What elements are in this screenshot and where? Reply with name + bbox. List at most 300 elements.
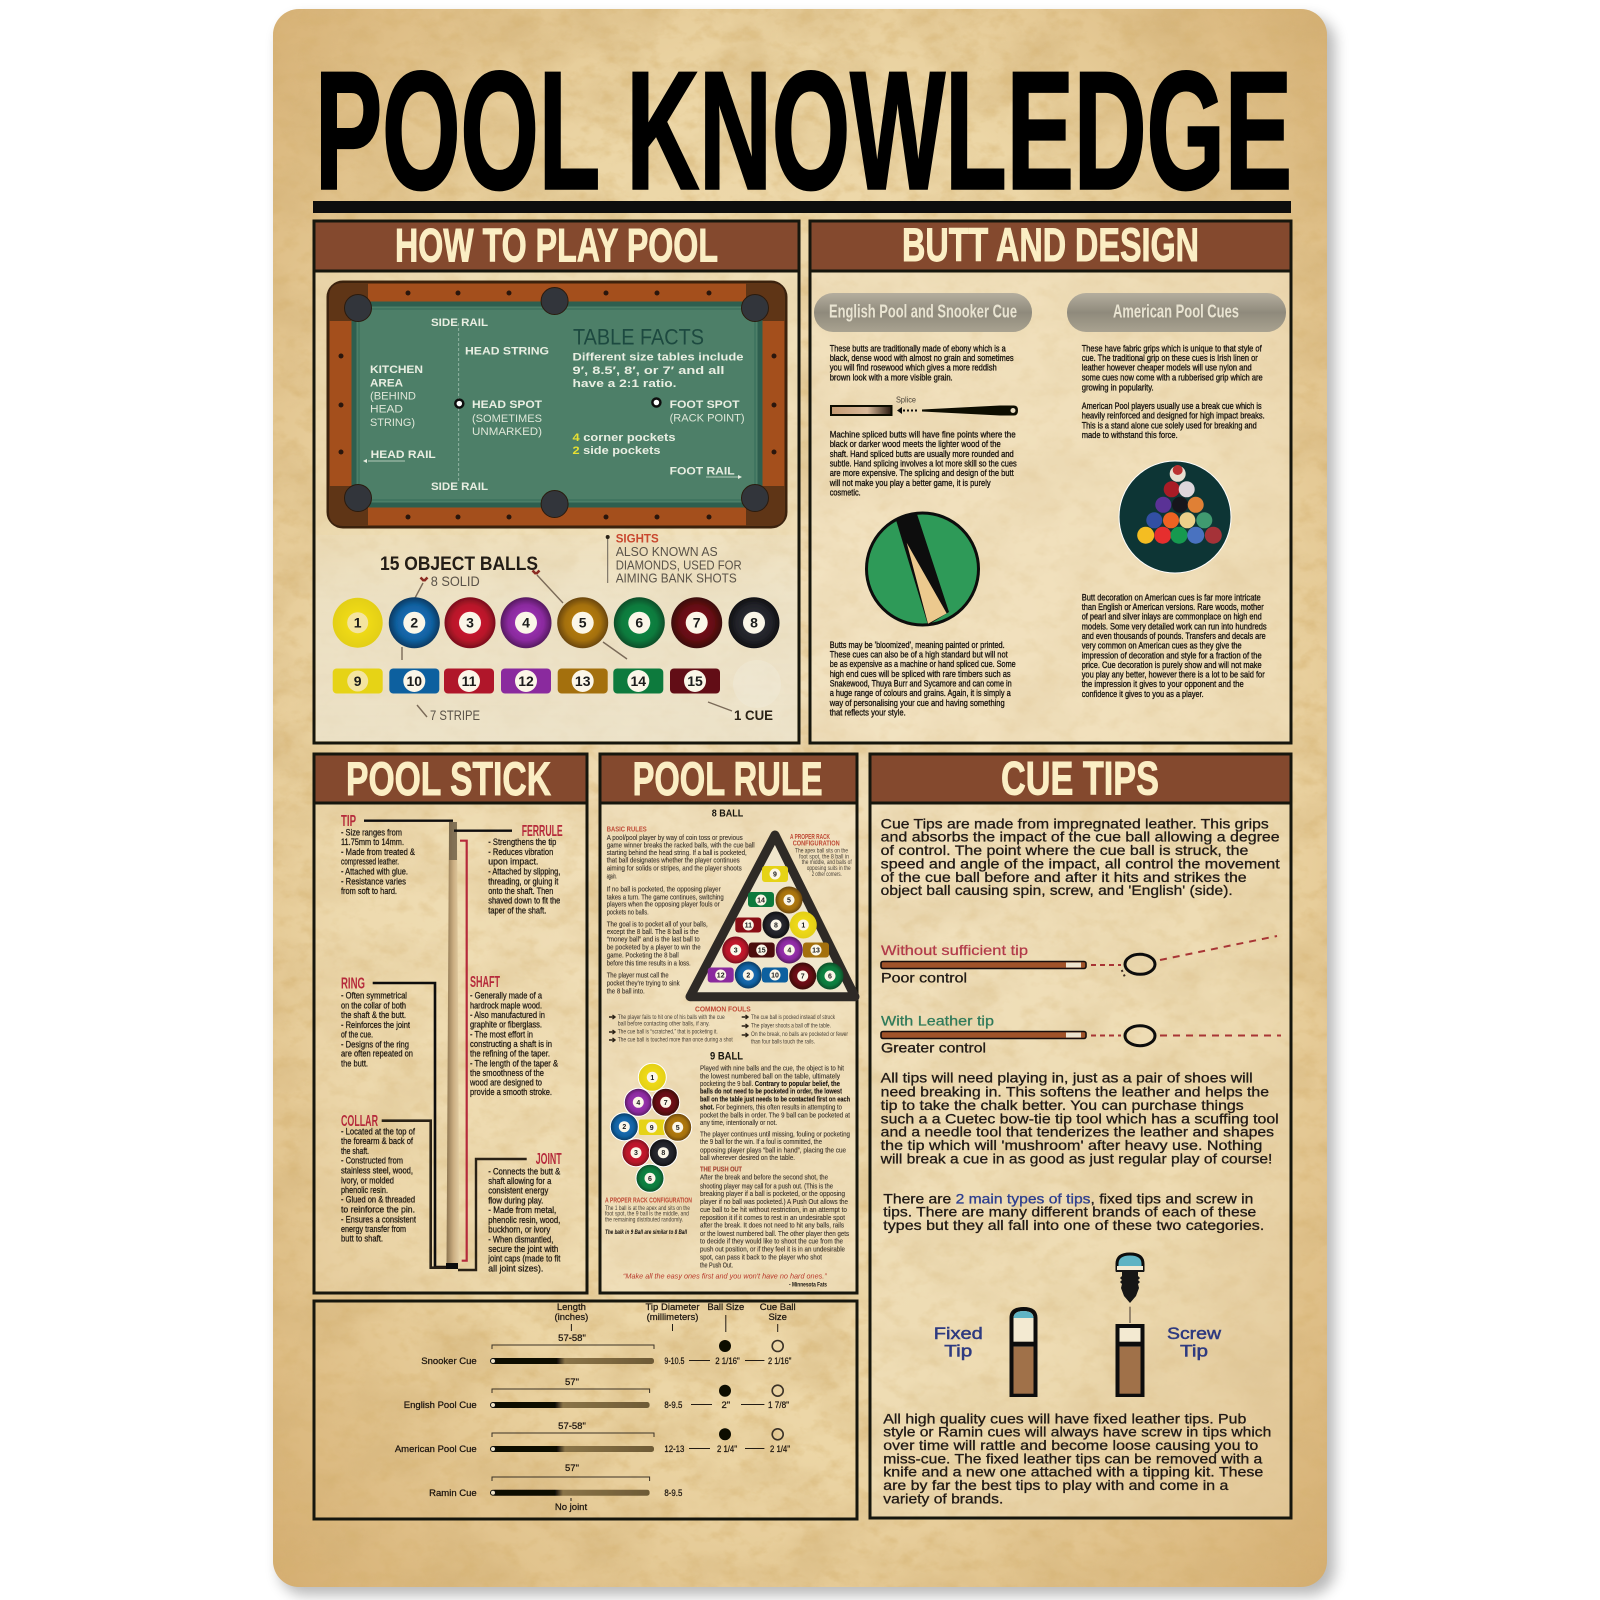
label: ring: on the collar of both [341, 1000, 406, 1010]
splice cue diagram: Splice [896, 395, 916, 404]
text: english butts intro: you will find rosewood which gives a more reddish [830, 363, 997, 373]
row: snooker cue [421, 1333, 791, 1367]
9 ball diamond rack: 5 [676, 1125, 680, 1132]
common fouls: The cue ball is “scratched,” that is pocketing it. [618, 1029, 718, 1035]
pool stick diagram [364, 821, 527, 1270]
label: ferrule: - Attached by slipping, [488, 866, 560, 876]
ball connector lines [402, 570, 732, 717]
9 ball diamond rack: 3 [634, 1150, 638, 1157]
pill: english pool and snooker cue: English Pool and Snooker Cue [829, 302, 1017, 322]
8 ball rules text: BASIC RULES [607, 827, 647, 834]
text: american butt decoration: confidence it gives to you as a player. [1082, 689, 1204, 699]
playing in text: will break a cue in as good as just regular play of course! [880, 1150, 1272, 1166]
8 ball rules text: again. [607, 871, 617, 880]
fixed vs screw text: miss-cue. The fixed leather tips can be removed with a [883, 1450, 1263, 1466]
rack triangle with balls: 14 [757, 898, 765, 904]
icon: fixed tip [934, 1309, 1036, 1395]
8 ball rules text: the 8 ball into. [607, 986, 645, 995]
label: collar: - Located at the top of [341, 1126, 415, 1136]
8 ball rules text: game winner breaks the racked balls, with the cue ball [607, 840, 755, 849]
table labels: STRING) [370, 417, 415, 429]
header: pool stick: POOL STICK [346, 752, 551, 805]
9 ball rules text: shot. For beginners, this often results in attempting to [700, 1102, 842, 1111]
panel: how to play pool [314, 218, 799, 743]
rack configuration note: The apex ball sits on the [795, 849, 849, 855]
text: american butt decoration: models. Some very detailed work can run into hundreds [1082, 621, 1267, 631]
diamonds [338, 290, 776, 520]
rack configuration note [790, 834, 852, 878]
label: shaft: - Also manufactured in [470, 1010, 545, 1020]
8 ball rules text: before this time results in a loss. [607, 959, 691, 968]
striped balls row [333, 668, 720, 694]
text: american butt decoration: you play any better, however there is a lot to be said for [1082, 670, 1265, 680]
rack configuration note: CONFIGURATION [793, 841, 840, 848]
sights note: DIAMONDS, USED FOR [616, 558, 742, 572]
column headers: Length [557, 1302, 586, 1313]
icon: fixed tip: Tip [944, 1342, 972, 1361]
playing in text: the tip which will 'mushroom' after heavy use. Nothing [881, 1137, 1262, 1153]
label: collar: to reinforce the pin. [341, 1204, 415, 1214]
table labels: KITCHEN [370, 364, 423, 376]
label: tip: TIP [341, 813, 356, 830]
label: ferrule: shaved down to fit the [488, 896, 560, 906]
row: snooker cue: 2 1/16" [768, 1356, 791, 1367]
playing in text: need breaking in. This softens the leather and helps the [881, 1084, 1269, 1100]
row: snooker cue: 2 1/16" [715, 1356, 740, 1367]
text: bloomized butts: Snakewood, Thuya Burr and Sycamore and can come in [830, 679, 1012, 689]
text: american butt decoration: and even thousands of pounds. Transfers and decals are [1082, 631, 1266, 641]
text: bloomized butts: that reflects your style. [830, 708, 906, 718]
diagram: without sufficient tip: Without sufficient tip [881, 942, 1028, 958]
8 ball rules text: pockets no balls. [607, 907, 649, 916]
label: joint: secure the joint with [488, 1244, 558, 1254]
9 ball rules text: any time, intentionally or not. [700, 1118, 777, 1127]
pill: english pool and snooker cue [814, 293, 1032, 332]
solid balls row: 2 [410, 614, 418, 630]
diagram: with leather tip: Greater control [881, 1040, 986, 1056]
9 ball rules text: Played with nine balls and the cue, the object is to hit [700, 1064, 844, 1073]
label: shaft: SHAFT [470, 974, 500, 991]
header: how to play pool: HOW TO PLAY POOL [395, 218, 718, 272]
quote: “Make all the easy ones first and you won't have no hard ones.” [623, 1271, 827, 1280]
9 ball diamond rack: 9 [650, 1125, 654, 1132]
8 ball rules text: starting behind the head string. If a ball is pocketed, [607, 848, 747, 857]
9 ball rules text: pocket the balls in order. The 9 ball can be pocketed at [700, 1110, 850, 1119]
table labels: FOOT SPOT [670, 399, 740, 411]
label: tip [341, 813, 415, 896]
text: bloomized butts: These cues can also be of a high standard but will not [830, 650, 1008, 660]
label: ring: - Reinforces the joint [341, 1020, 410, 1030]
text: bloomized butts: a huge range of colours and grains. Again, it is simply a [830, 688, 1011, 698]
intro text: speed and angle of the impact, all control the movement [881, 855, 1280, 871]
icon: screw tip: Screw [1167, 1324, 1222, 1343]
row: english pool cue: 8-9.5 [664, 1400, 682, 1411]
panel: butt and design [810, 218, 1291, 743]
fixed vs screw text: knife and a new one attached with a tipping kit. These [883, 1464, 1264, 1480]
table labels: TABLE FACTS [573, 325, 704, 350]
label: joint: - Made from metal, [488, 1205, 556, 1215]
label: ring: - Often symmetrical [341, 991, 407, 1001]
label: collar: COLLAR [341, 1113, 378, 1130]
row: american pool cue: 12-13 [664, 1444, 684, 1455]
rack triangle with balls: 3 [734, 948, 738, 954]
solid balls row: 4 [522, 614, 530, 630]
solid balls row: 7 [693, 614, 701, 630]
text: american cues intro: cue. The traditional grip on these cues is Irish linen or [1082, 353, 1258, 363]
rack configuration note: 2 other corners. [812, 872, 842, 878]
text: english butts intro: brown look with a more visible grain. [830, 373, 953, 383]
table labels: HEAD RAIL [371, 449, 436, 461]
label: ring [341, 976, 413, 1069]
8 ball rules text: pocket they're trying to sink [607, 979, 680, 988]
8 ball rules text [607, 808, 755, 995]
9 ball rules text: breaking player if a ball is pocketed, or the opposing [700, 1189, 845, 1198]
rack triangle with balls: 15 [758, 948, 766, 954]
table labels [363, 317, 745, 493]
row: english pool cue [404, 1377, 789, 1411]
9 ball rules text: the lowest numbered ball on the table, ultimately [700, 1072, 840, 1081]
9 ball diamond rack: 2 [622, 1124, 626, 1131]
9 ball rules text: opposing player plays “ball in hand”, placing the cue [700, 1145, 846, 1154]
8 ball rules text: players when the opposing player fouls or [607, 900, 720, 909]
9 ball diamond rack: 4 [636, 1100, 640, 1107]
9 ball rules text: After the break and before the second shot, the [700, 1172, 828, 1181]
9 ball rack caption: The balk in 9 Ball are similar to 8 Ball [605, 1229, 687, 1236]
label: shaft: graphite or fiberglass. [470, 1020, 542, 1030]
header: cue tips: CUE TIPS [1001, 752, 1159, 804]
9 ball rules text: spot, can pass it back to the player who shot [700, 1252, 822, 1261]
text: american butt decoration [1082, 592, 1267, 699]
8 ball rules text: The goal is to pocket all of your balls, [607, 920, 708, 929]
8 ball rules text: game. Pocketing the 8 ball [607, 951, 679, 960]
label: ferrule [488, 823, 563, 915]
8 ball rules text: If no ball is pocketed, the opposing player [607, 885, 721, 894]
intro text [881, 815, 1280, 898]
fixed vs screw text: variety of brands. [883, 1490, 1003, 1506]
diagram: without sufficient tip [881, 936, 1277, 985]
rack triangle with balls: 2 [746, 972, 750, 980]
table labels: Different size tables include [572, 352, 744, 364]
9 ball rules text: or the lowest numbered ball. The other player then gets [700, 1229, 849, 1238]
9 ball rack caption: The 1 ball is at the apex and sits on the [605, 1206, 691, 1212]
quote: - Minnesota Fats [789, 1282, 827, 1289]
fixed vs screw text: All high quality cues will have fixed leather tips. Pub [883, 1410, 1247, 1426]
label: collar [341, 1113, 416, 1244]
playing in text: and a needle tool that tenderizes the leather and shapes [881, 1124, 1274, 1140]
9 ball rules text: push out position, or if they feel it is in an undesirable [700, 1245, 845, 1254]
row: american pool cue: 2 1/4" [770, 1444, 790, 1455]
striped balls row: 12 [518, 673, 534, 689]
label: tip: - Attached with glue. [341, 866, 408, 876]
striped balls row: 11 [462, 673, 477, 689]
solid balls row: 8 [750, 614, 758, 630]
row: snooker cue: 9-10.5 [664, 1356, 684, 1367]
solid balls row: 1 [354, 614, 362, 630]
label: joint: all joint sizes). [488, 1263, 543, 1273]
stripe and cue labels: 7 STRIPE [430, 707, 480, 723]
playing in text: such a a Cuetec bow-tie tip tool which has a scuffing tool [881, 1110, 1279, 1126]
object balls heading [380, 554, 538, 589]
label: shaft: - Generally made of a [470, 990, 543, 1000]
label: tip: - Made from treated & [341, 847, 415, 857]
text: american cues intro [1082, 343, 1265, 440]
title rule [313, 201, 1291, 213]
header: butt and design: BUTT AND DESIGN [902, 218, 1199, 271]
striped balls row: 10 [407, 673, 422, 689]
text: american cues intro: growing in popularity. [1082, 382, 1154, 392]
rack triangle with balls [690, 835, 855, 997]
diagram: without sufficient tip: Poor control [881, 969, 967, 985]
intro text: of control. The point where the cue ball is struck, the [881, 842, 1249, 858]
common fouls [609, 1007, 848, 1045]
rack triangle with balls: 9 [773, 872, 777, 878]
stripe and cue labels [430, 660, 781, 723]
label: ring: the butt. [341, 1059, 368, 1069]
label: joint: - When dismantled, [488, 1234, 553, 1244]
text: splice explanation: will not make you play a better game, it is purely [829, 478, 991, 488]
column headers [555, 1302, 796, 1332]
row: ramin cue: Ramin Cue [429, 1488, 477, 1499]
types of tips text: types but they all fall into one of these two categories. [883, 1217, 1264, 1233]
table labels: SIDE RAIL [431, 317, 488, 329]
common fouls: The cue ball is pocked instead of struck [751, 1015, 836, 1021]
sights note: AIMING BANK SHOTS [616, 572, 737, 586]
label: ferrule: onto the shaft. Then [488, 886, 553, 896]
label: collar: - Glued on & threaded [341, 1195, 415, 1205]
icon: cue butt on green circle [866, 508, 978, 625]
types of tips text: There are 2 main types of tips , fixed tips and screw in [883, 1190, 1253, 1206]
label: shaft: - The length of the taper & [470, 1059, 558, 1069]
label: shaft: the refining of the taper. [470, 1049, 550, 1059]
9 ball rules text: THE PUSH OUT [700, 1167, 743, 1174]
text: splice explanation: cosmetic. [830, 488, 861, 498]
label: collar: energy transfer from [341, 1224, 406, 1234]
icon: screw tip [1116, 1254, 1222, 1395]
common fouls: The player shoots a ball off the table. [751, 1023, 831, 1029]
intro text: of the cue ball before and after it hits and strikes the [881, 869, 1247, 885]
row: ramin cue: No joint [555, 1502, 587, 1513]
table labels: (SOMETIMES [472, 413, 542, 425]
column headers: Tip Diameter [645, 1302, 700, 1313]
label: ring: RING [341, 976, 365, 993]
label: collar: - Constructed from [341, 1156, 403, 1166]
playing in text [880, 1070, 1279, 1166]
table labels: HEAD STRING [465, 346, 549, 358]
rack triangle with balls: 7 [801, 974, 805, 980]
panel: cue tips [870, 752, 1291, 1518]
playing in text: tip to take the chalk better. You can purchase things [881, 1097, 1244, 1113]
fixed vs screw text: are by far the best tips to play with and come in a [883, 1477, 1229, 1493]
label: joint [487, 1151, 562, 1273]
text: english butts intro: black, dense wood with almost no grain and sometimes [830, 353, 1014, 363]
text: american cues intro: This is a stand alone cue solely used for breaking and [1082, 420, 1257, 430]
9 ball rules text: the Push Out. [700, 1260, 733, 1269]
9 ball rules text: ball on the table just needs to be contacted first on each [700, 1095, 850, 1104]
types of tips text [883, 1190, 1264, 1233]
icon: fixed tip: Fixed [934, 1324, 983, 1343]
label: ferrule: - Reduces vibration [488, 847, 553, 857]
label: ferrule: taper of the shaft. [488, 905, 546, 915]
object balls heading: 15 OBJECT BALLS [380, 554, 538, 575]
icon: screw tip: Tip [1180, 1342, 1208, 1361]
playing in text: All tips will need playing in, just as a pair of shoes will [881, 1070, 1253, 1086]
label: collar: the forearm & back of [341, 1136, 413, 1146]
label: joint: joint caps (made to fit [487, 1254, 561, 1264]
common fouls: than four balls touch the rails. [751, 1039, 815, 1045]
label: joint: consistent energy [488, 1186, 549, 1196]
label: shaft: - The most effort in [470, 1029, 533, 1039]
9 ball rules text: shooting player may call for a push out. (This is the [700, 1181, 833, 1190]
table labels: FOOT RAIL [670, 465, 735, 477]
label: ferrule: threading, or gluing it [488, 876, 559, 886]
8 ball rules text: 8 BALL [712, 808, 744, 820]
panel: cue comparison table [314, 1301, 857, 1519]
common fouls: The cue ball is touched more than once during a shot [618, 1038, 733, 1044]
sights note: SIGHTS [616, 532, 659, 546]
table labels: HEAD SPOT [472, 399, 542, 411]
text: bloomized butts: way of personalising your cue and having something [829, 698, 1005, 708]
text: splice explanation: Machine spliced butts will have fine points where the [830, 430, 1016, 440]
panel: pool rule [600, 752, 857, 1293]
label: shaft: constructing a shaft is in [470, 1039, 552, 1049]
intro text: Cue Tips are made from impregnated leather. This grips [881, 815, 1269, 831]
9 ball rack caption: foot spot, the 9 ball is the middle, and [605, 1212, 689, 1218]
label: collar: phenolic resin. [341, 1185, 388, 1195]
diagram: with leather tip: With Leather tip [881, 1013, 994, 1029]
9 ball diamond rack: 7 [664, 1100, 668, 1107]
text: splice explanation: shaft. Hand spliced butts are usually more rounded and [830, 449, 1014, 459]
rack triangle with balls: 11 [745, 922, 752, 930]
text: english butts intro [830, 343, 1014, 383]
text: english butts intro: These butts are traditionally made of ebony which is a [830, 343, 1006, 353]
types of tips text: tips. There are many different brands of each of these [883, 1204, 1257, 1220]
column headers: Cue Ball [760, 1302, 796, 1313]
8 ball rules text: A pool/pool player by way of coin toss or previous [607, 833, 743, 842]
9 ball rules text: balls do not need to be pocketed in order, the lowest [700, 1087, 842, 1096]
label: collar: stainless steel, wood, [341, 1165, 413, 1175]
column headers: Ball Size [707, 1302, 744, 1313]
9 ball rules text: cue ball to be hit without restriction, in an attempt to [700, 1205, 847, 1214]
label: tip: - Size ranges from [341, 827, 402, 837]
9 ball diamond rack [610, 1063, 692, 1192]
8 ball rules text: that ball designates whether the player continues [607, 856, 740, 865]
table labels: have a 2:1 ratio. [572, 378, 676, 390]
rack configuration note: opposing suits in the [807, 866, 851, 872]
text: american cues intro: These have fabric grips which is unique to that style of [1082, 343, 1262, 353]
8 ball rules text: aiming for solids or stripes, and the player shoots [607, 864, 742, 873]
header: cue tips [870, 752, 1291, 804]
row: american pool cue: American Pool Cue [395, 1444, 477, 1455]
striped balls row: 15 [687, 673, 703, 689]
text: american butt decoration: price. Cue decoration is purely show and will not make [1082, 660, 1262, 670]
table labels: UNMARKED) [472, 426, 542, 438]
8 ball rules text: be pocketed by a player to win the [607, 942, 701, 951]
pool table diagram [328, 282, 786, 527]
9 ball rules text [700, 1050, 850, 1269]
striped balls row: 9 [354, 673, 362, 689]
label: ferrule: - Strengthens the tip [488, 837, 556, 847]
table labels: AREA [370, 377, 403, 389]
9 ball rack caption [605, 1198, 692, 1236]
label: shaft: wood are designed to [469, 1078, 542, 1088]
text: american butt decoration: impression of decoration and style for a fraction of the [1082, 650, 1262, 660]
text: splice explanation: black or darker wood meets the lighter wood of the [830, 439, 1001, 449]
stripe and cue labels: 1 CUE [734, 707, 773, 723]
9 ball diamond rack: 6 [648, 1176, 652, 1183]
card shadow [279, 17, 1335, 1595]
table labels: 2 side pockets [572, 445, 660, 457]
sights note [606, 532, 742, 586]
text: splice explanation: are more expensive. The splicing and design of the butt [830, 468, 1014, 478]
head string line [458, 323, 460, 482]
text: splice explanation [829, 430, 1017, 498]
label: joint: phenolic resin, wood, [488, 1215, 560, 1225]
9 ball rules text: The player continues until missing, fouling or pocketing [700, 1130, 850, 1139]
row: american pool cue: 57-58" [558, 1421, 586, 1432]
rack configuration note: the middle, and balls of [802, 860, 852, 866]
label: tip: - Resistance varies [341, 876, 406, 886]
row: snooker cue: 57-58" [558, 1333, 586, 1344]
rack configuration note: A PROPER RACK [790, 834, 830, 841]
text: bloomized butts: be as expensive as a machine or hand spliced cue. Some [830, 659, 1016, 669]
panel: pool stick [314, 752, 587, 1293]
rack triangle with balls: 12 [717, 972, 725, 980]
header: pool rule: POOL RULE [633, 752, 823, 805]
text: american butt decoration: of pearl and silver inlays are commonplace on high end [1082, 612, 1262, 622]
common fouls: The player fails to hit one of his balls with the cue [618, 1015, 725, 1021]
sights note: ALSO KNOWN AS [616, 545, 718, 559]
rack triangle with balls: 8 [774, 922, 778, 930]
solid balls row: 5 [579, 614, 587, 630]
row: english pool cue: English Pool Cue [404, 1400, 477, 1411]
icon: racked balls on dark circle [1119, 461, 1231, 573]
text: american butt decoration: very common on American cues as they give the [1082, 641, 1242, 651]
striped balls row: 13 [575, 673, 591, 689]
label: joint: shaft allowing for a [488, 1176, 552, 1186]
column headers: Size [768, 1312, 787, 1323]
label: tip: 11.75mm to 14mm. [341, 837, 404, 847]
row: ramin cue [429, 1463, 682, 1513]
label: collar: butt to shaft. [341, 1234, 383, 1244]
label: ring: of the cue. [341, 1030, 373, 1040]
9 ball rules text: 9 BALL [710, 1050, 743, 1062]
table labels: 4 corner pockets [572, 432, 676, 444]
9 ball diamond rack: 1 [650, 1075, 654, 1082]
rack triangle with balls: 1 [801, 922, 805, 930]
9 ball rules text: reposition it if it comes to rest in an undesirable spot [700, 1213, 845, 1222]
table labels: 9′, 8.5′, 8′, or 7′ and all [572, 365, 724, 377]
label: tip: from soft to hard. [341, 886, 397, 896]
diagram: with leather tip [881, 1013, 1281, 1056]
table labels: (RACK POINT) [670, 412, 745, 424]
text: american cues intro: leather however cheaper models will use nylon and [1082, 363, 1252, 373]
label: shaft: the smoothness of the [470, 1068, 544, 1078]
label: shaft: provide a smooth stroke. [470, 1087, 552, 1097]
8 ball rules text: The player must call the [607, 971, 669, 980]
solid balls row: 6 [635, 614, 643, 630]
text: american cues intro: heavily reinforced and designed for high impact breaks. [1082, 411, 1265, 421]
pockets [344, 288, 768, 518]
text: bloomized butts: Butts may be 'bloomized', meaning painted or printed. [830, 640, 1005, 650]
label: joint: JOINT [536, 1151, 562, 1168]
quote [623, 1271, 827, 1289]
9 ball rack caption: A PROPER RACK CONFIGURATION [605, 1198, 692, 1205]
row: american pool cue [395, 1421, 790, 1455]
row: english pool cue: 57" [565, 1377, 579, 1388]
solid balls row [333, 597, 780, 648]
text: splice explanation: subtle. Hand splicing involves a lot more skill so the cues [830, 459, 1017, 469]
label: joint: buckhorn, or ivory [488, 1225, 551, 1235]
